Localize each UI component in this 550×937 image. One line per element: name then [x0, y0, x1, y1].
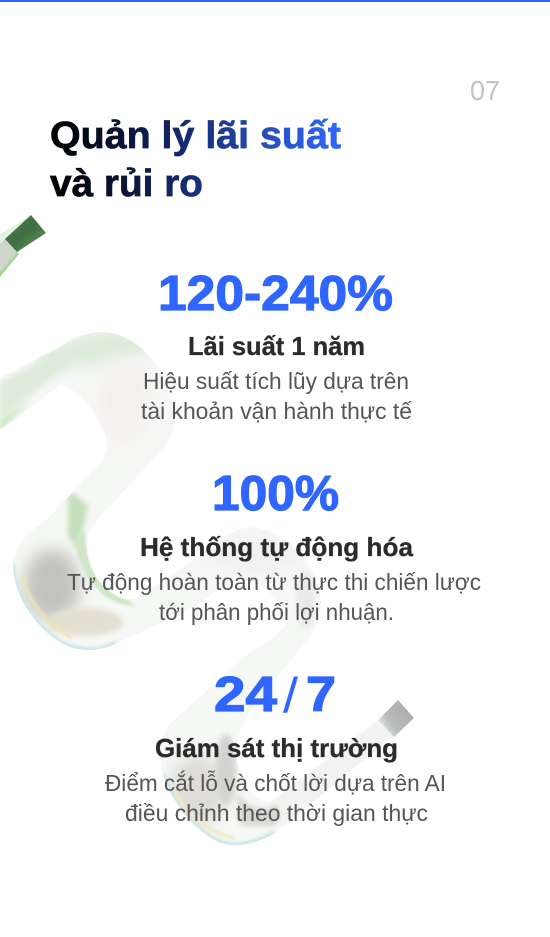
stat description [67, 569, 481, 625]
stat description: tài khoản vận hành thực tế [141, 398, 412, 424]
stat description: Điểm cắt lỗ và chốt lời dựa trên AI [105, 770, 446, 796]
title [50, 115, 341, 205]
stat label: Lãi suất 1 năm [188, 331, 365, 361]
stat block: annual interest [141, 267, 412, 424]
stat value: 100% [212, 467, 339, 521]
title: Quản lý lãi suất [50, 115, 341, 157]
stat label: Hệ thống tự động hóa [140, 532, 414, 562]
stat value: 24 [214, 668, 277, 722]
stat block: market monitoring [105, 668, 446, 826]
ribbon tip: upper left [0, 215, 46, 277]
top accent bar [0, 0, 550, 2]
stat description: Hiệu suất tích lũy dựa trên [143, 368, 409, 394]
glass ribbon decoration [0, 215, 430, 860]
stat description: tới phân phối lợi nhuận. [159, 599, 394, 625]
ribbon end face: lower right [378, 700, 414, 737]
stat value: 7 [306, 668, 336, 722]
stat block: automation [67, 467, 481, 625]
page number: 07 [470, 75, 500, 106]
stat value: 120-240% [158, 267, 393, 321]
stat description: điều chỉnh theo thời gian thực [125, 800, 428, 826]
stat value [214, 668, 336, 723]
ribbon body: flowing S-shape [0, 332, 393, 846]
stat description: Tự động hoàn toàn từ thực thi chiến lược [67, 569, 481, 595]
title: và rủi ro [50, 163, 203, 205]
stat label: Giám sát thị trường [155, 733, 398, 763]
stat description [105, 770, 446, 826]
stat description [141, 368, 412, 424]
stat value: / [283, 669, 298, 723]
